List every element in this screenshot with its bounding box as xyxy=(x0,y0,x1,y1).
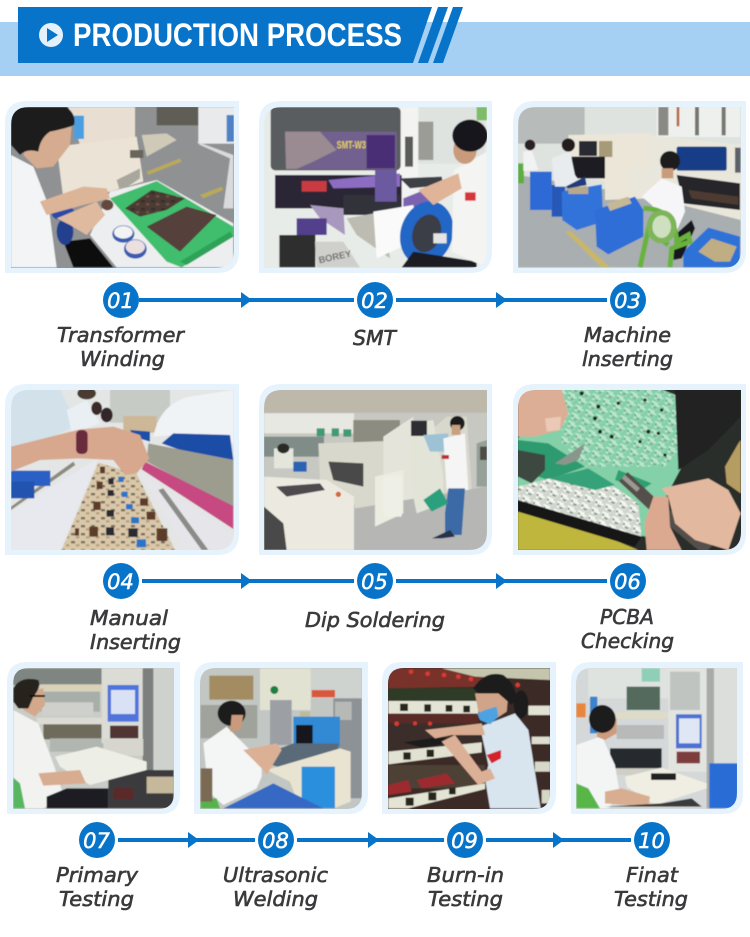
arrow: 01 to 02 xyxy=(139,292,354,308)
heading: production process: PRODUCTION PROCESS xyxy=(73,17,402,53)
connector: step 10 badge xyxy=(634,822,670,858)
arrow: 04 to 05 xyxy=(142,573,354,589)
connector: step 02 badge: 02 xyxy=(361,289,388,313)
connector: step 07 badge: 07 xyxy=(83,829,110,853)
label: SMT: SMT xyxy=(353,326,398,350)
photo: wave soldering machine xyxy=(264,390,487,550)
label: finat testing: Testing xyxy=(614,887,688,911)
connector: step 08 badge xyxy=(258,822,294,858)
photo: burn-in rack xyxy=(385,665,555,812)
photo: SMT machine xyxy=(264,107,487,268)
connector: step 01 badge xyxy=(103,282,139,318)
label: transformer winding: Transformer xyxy=(57,323,186,347)
arrow: 07 to 08 xyxy=(118,832,255,848)
connector: step 10 badge: 10 xyxy=(638,829,665,853)
label: burn-in testing: Burn-in xyxy=(427,863,504,887)
panel: ultrasonic welding photo xyxy=(194,662,368,814)
arrow: 08 to 09 xyxy=(297,832,444,848)
connector: step 02 badge xyxy=(357,282,393,318)
photo: worker winding transformers xyxy=(11,107,234,268)
panel: PCBA checking photo xyxy=(513,384,746,555)
arrow: 05 to 06 xyxy=(396,573,607,589)
connector: step 06 badge xyxy=(610,563,646,599)
connector: step 03 badge: 03 xyxy=(614,289,641,313)
panel: machine inserting photo xyxy=(513,101,746,273)
connector: step 08 badge: 08 xyxy=(262,829,289,853)
panel: burn-in testing photo xyxy=(382,662,556,814)
connector: step 09 badge xyxy=(447,822,483,858)
title banner xyxy=(0,7,750,76)
photo: PCB checking xyxy=(515,387,745,553)
label: manual inserting xyxy=(90,606,181,654)
photo: SMT machine: SMT-W3 xyxy=(337,139,366,151)
connector: step 09 badge: 09 xyxy=(451,829,478,853)
label: PCBA checking: Checking xyxy=(581,629,674,653)
label: burn-in testing: Testing xyxy=(428,887,503,911)
label: dip soldering: Dip Soldering xyxy=(305,608,445,632)
label: manual inserting: Inserting xyxy=(90,630,181,654)
connector: step 04 badge xyxy=(103,563,139,599)
panel: SMT photo xyxy=(259,101,493,275)
label: primary testing: Testing xyxy=(59,887,134,911)
label: ultrasonic welding: Ultrasonic xyxy=(223,863,328,887)
connector: step 05 badge: 05 xyxy=(361,570,388,594)
connector: step 05 badge xyxy=(357,563,393,599)
photo: primary testing station xyxy=(10,665,177,812)
photo: final testing station xyxy=(573,665,740,812)
icon: play circle xyxy=(39,23,63,47)
photo: ultrasonic welder xyxy=(197,665,367,812)
label: primary testing: Primary xyxy=(56,863,139,887)
photo: machine inserting line xyxy=(515,105,745,272)
label: PCBA checking: PCBA xyxy=(600,605,654,629)
arrow: 09 to 10 xyxy=(486,832,631,848)
panel: manual inserting photo xyxy=(5,384,240,555)
label: manual inserting: Manual xyxy=(90,606,168,630)
photo: manual inserting line xyxy=(7,387,240,553)
label: transformer winding: Winding xyxy=(80,347,165,371)
label: finat testing xyxy=(614,863,688,911)
panel: final testing photo xyxy=(571,662,743,814)
connector: step 01 badge: 01 xyxy=(107,289,134,313)
connector: step 07 badge xyxy=(79,822,115,858)
panel: transformer winding photo xyxy=(0,95,240,275)
label: machine inserting: lnserting xyxy=(582,347,673,371)
label: machine inserting xyxy=(582,323,673,371)
label: burn-in testing xyxy=(427,863,504,911)
label: finat testing: Finat xyxy=(626,863,679,887)
panel: dip soldering photo xyxy=(259,384,493,557)
label: primary testing xyxy=(56,863,139,911)
label: ultrasonic welding xyxy=(223,863,328,911)
label: transformer winding xyxy=(57,323,186,371)
photo: SMT machine: BOREY xyxy=(318,248,353,265)
connector: step 06 badge: 06 xyxy=(614,570,641,594)
panel: primary testing photo xyxy=(7,662,180,814)
connector: step 04 badge: 04 xyxy=(107,570,134,594)
label: ultrasonic welding: Welding xyxy=(233,887,318,911)
label: PCBA checking xyxy=(581,605,674,653)
connector: step 03 badge xyxy=(610,282,646,318)
label: machine inserting: Machine xyxy=(584,323,671,347)
arrow: 02 to 03 xyxy=(396,292,607,308)
